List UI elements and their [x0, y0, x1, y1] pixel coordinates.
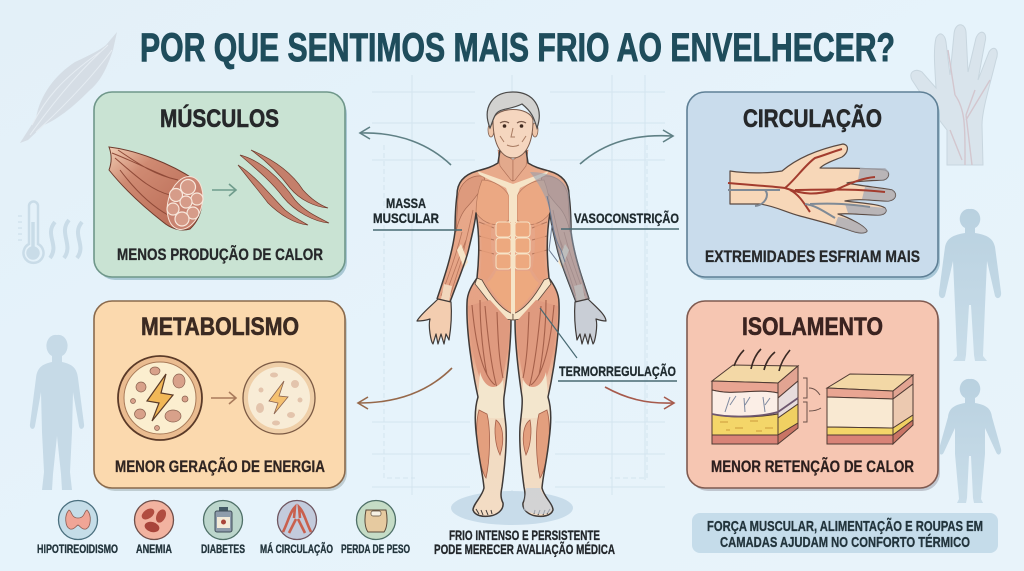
silhouette: left: [30, 335, 84, 490]
caption: músculos: MENOS PRODUÇÃO DE CALOR: [117, 244, 323, 264]
label: massa muscular: MASSA: [386, 195, 426, 211]
icon: thick muscle bundle: [109, 147, 208, 233]
icon: weakened cell: [243, 362, 315, 434]
condition: hipotireoidismo: [37, 500, 118, 556]
label: vasoconstrição: VASOCONSTRIÇÃO: [574, 209, 679, 226]
icon: thin skin block: [827, 374, 913, 444]
arrow: figure to insulation: [605, 387, 674, 409]
arrow: metabolism decline: [211, 392, 236, 404]
faded thermometer and heat waves: [18, 202, 82, 263]
label: massa muscular: MUSCULAR: [373, 210, 439, 226]
faded muscle illustration: [20, 32, 117, 143]
icon: hand with veins: [728, 144, 895, 233]
icon: thin muscle fibres: [238, 150, 329, 225]
left hand: [417, 299, 451, 344]
label: termorregulação: [540, 308, 677, 381]
condition: má circulação: [260, 500, 333, 556]
label: termorregulação: TERMORREGULAÇÃO: [559, 362, 676, 379]
medical note: [434, 527, 615, 557]
silhouette: top right: [939, 209, 1001, 361]
condition: perda de peso: [341, 500, 410, 556]
condition: hipotireoidismo: HIPOTIREOIDISMO: [37, 544, 118, 556]
heading: isolamento: ISOLAMENTO: [742, 313, 883, 341]
condition: má circulação: MÁ CIRCULAÇÃO: [260, 543, 333, 556]
cold right arm tint: [530, 172, 589, 302]
caption: metabolismo: MENOR GERAÇÃO DE ENERGIA: [115, 456, 325, 476]
condition: diabetes: DIABETES: [201, 544, 245, 556]
arrow: figure to circulation: [580, 130, 673, 164]
caption: circulação: EXTREMIDADES ESFRIAM MAIS: [705, 247, 920, 266]
arrow: muscle loss: [212, 184, 236, 196]
panel: músculos: [94, 92, 347, 280]
panel: isolamento: [687, 301, 940, 491]
arrow: figure to muscles: [360, 127, 451, 165]
icon: thick skin block: [712, 349, 798, 444]
condition: perda de peso: PERDA DE PESO: [341, 544, 410, 556]
label: massa muscular: [373, 195, 462, 230]
heading: músculos: MÚSCULOS: [160, 103, 279, 133]
faded hand illustration: [911, 25, 997, 165]
panel: metabolismo: [94, 301, 347, 491]
brackets and arrows between skin blocks: [803, 378, 821, 422]
medical note: PODE MERECER AVALIAÇÃO MÉDICA: [434, 540, 615, 557]
head: [487, 92, 539, 158]
callout: thermal comfort tips: [692, 513, 998, 553]
label: vasoconstrição: [561, 209, 679, 229]
heading: circulação: CIRCULAÇÃO: [743, 103, 882, 133]
icon: active cell: [118, 356, 202, 440]
arrow: figure to metabolism: [358, 368, 452, 409]
heading: metabolismo: METABOLISMO: [141, 313, 299, 341]
condition: diabetes: [201, 500, 245, 556]
cold right foot: [524, 488, 552, 514]
silhouette: bottom right: [939, 379, 1001, 503]
condition: anemia: ANEMIA: [136, 544, 172, 556]
condition: anemia: [134, 500, 174, 556]
right hand: [575, 299, 606, 344]
caption: isolamento: MENOR RETENÇÃO DE CALOR: [711, 456, 914, 476]
medical note: FRIO INTENSO E PERSISTENTE: [449, 527, 600, 543]
central anatomical figure: [417, 92, 606, 516]
panel: circulação: [687, 92, 940, 280]
shadow under figure: [451, 491, 573, 525]
